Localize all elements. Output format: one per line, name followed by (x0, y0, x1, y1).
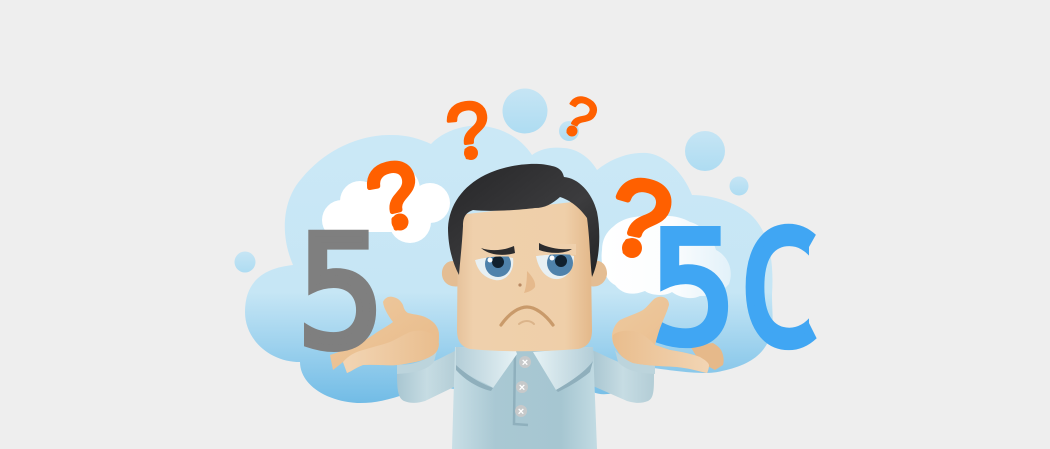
shirt body (452, 347, 597, 449)
bubble: right small (730, 176, 748, 196)
buttons: × (518, 406, 524, 418)
mouth (501, 307, 553, 325)
left cuff (397, 350, 437, 374)
buttons: × (519, 382, 525, 394)
white cloud right (602, 216, 731, 298)
collar right (533, 347, 593, 390)
nose (524, 271, 535, 293)
right hand fingers (690, 343, 724, 370)
left arm sleeve (397, 350, 457, 403)
bubble: small top right (559, 121, 579, 141)
buttons: × (522, 357, 528, 369)
question mark left: ? (357, 141, 431, 252)
right eye (534, 244, 576, 279)
numerals 5C blue (648, 198, 820, 380)
question mark top: ? (441, 84, 496, 177)
background cloud (245, 126, 773, 403)
left eye (475, 246, 516, 280)
bubble: far left (234, 252, 256, 272)
placket (514, 352, 528, 425)
right cuff (615, 350, 655, 374)
right arm sleeve (592, 350, 654, 403)
numeral 5 grey: 5 (296, 202, 385, 383)
left hand (330, 297, 439, 373)
mole (518, 283, 522, 287)
collar left (456, 347, 517, 388)
question mark right: ? (599, 155, 680, 282)
left eyebrow (481, 246, 515, 255)
head (457, 200, 592, 351)
bubble: top centre (502, 88, 548, 134)
left ear (442, 261, 460, 286)
collar shadow left (456, 365, 493, 391)
hair (448, 164, 599, 277)
collar shadow (556, 361, 593, 392)
right hand palm and thumb (612, 297, 709, 373)
white cloud left (322, 165, 450, 243)
right eyebrow (539, 243, 572, 253)
numerals 5C blue: C (743, 200, 820, 380)
right ear (590, 261, 607, 286)
buttons (515, 356, 531, 418)
chin mark (519, 321, 534, 324)
bubble: right large (685, 131, 725, 171)
numerals 5C blue: 5 (648, 198, 737, 379)
question mark top right: ? (552, 82, 606, 151)
